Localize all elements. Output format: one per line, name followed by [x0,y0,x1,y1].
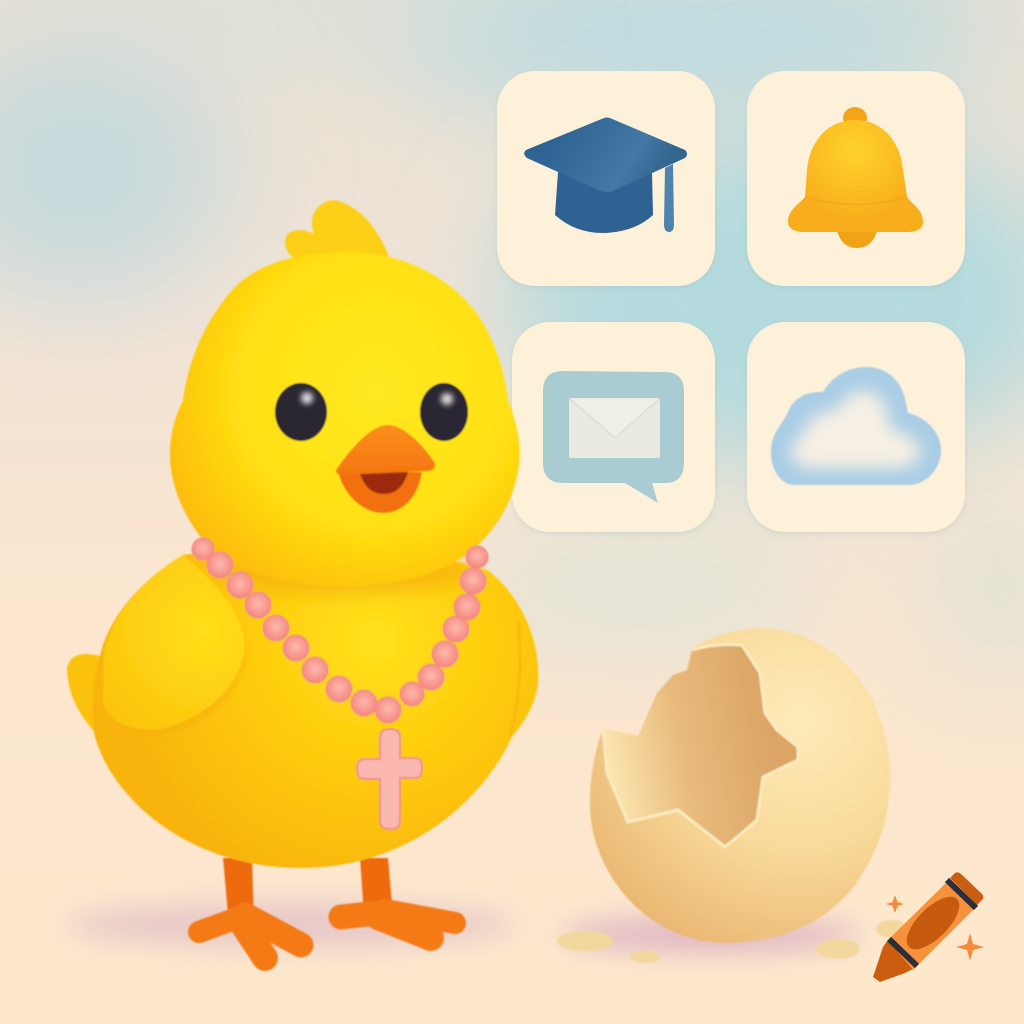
egg opening [603,645,798,847]
body [92,530,538,868]
egg shell [590,628,890,943]
envelope [569,398,660,458]
beak [336,425,435,513]
bell body [788,120,923,232]
feet [199,858,455,958]
crayon body [888,882,975,970]
cap base [555,172,653,233]
crack rim [603,645,798,847]
neck shadow [215,550,475,594]
icon tile: graduation cap [497,71,715,286]
icon tile: bell [747,71,965,286]
right wing edge [510,620,520,735]
cracked egg [557,628,908,963]
cross [357,729,422,829]
speech bubble [543,371,684,503]
eyes [275,383,468,441]
icon tile: cloud [747,322,965,532]
head crest [285,200,390,270]
wing [103,555,247,735]
chick [67,200,538,958]
bell knob [843,107,867,129]
sparkles [886,895,904,913]
bell rim shade [805,197,907,204]
crayon logo [873,872,984,982]
bell clapper [837,231,877,248]
tail [67,654,150,738]
head [170,252,520,586]
crayon tip [873,940,915,982]
icon tile: mail message [512,322,715,532]
shell fragments [557,920,908,963]
rosary necklace [192,538,488,829]
mortarboard [524,118,687,192]
ground shadows [65,903,860,951]
tassel [664,164,674,232]
crayon cap [950,872,984,905]
